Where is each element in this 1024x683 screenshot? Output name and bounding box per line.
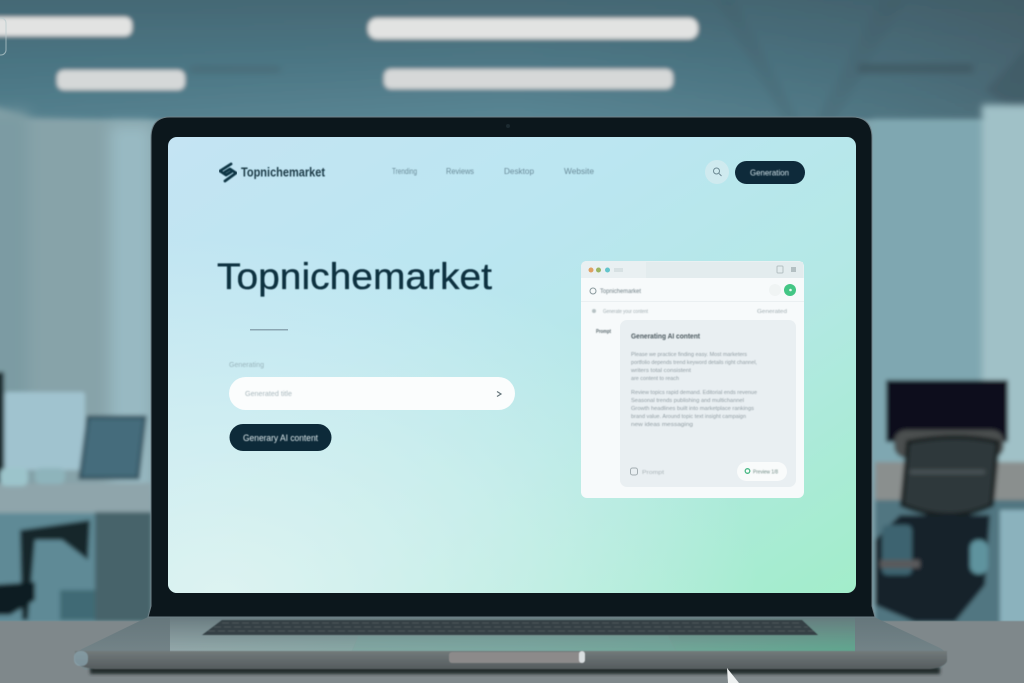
output title: Generating AI content <box>631 332 700 340</box>
logo <box>220 164 236 181</box>
nav links: Reviews <box>446 167 474 176</box>
output paragraph two: new ideas messaging <box>631 422 693 428</box>
output paragraph two <box>631 390 757 428</box>
nav links: Trending <box>392 167 417 176</box>
output footer: Preview 1/8 <box>753 470 778 476</box>
window sub row: Generated <box>757 309 787 315</box>
camera <box>506 124 510 128</box>
output paragraph two: Review topics rapid demand. Editorial ends revenue <box>631 390 757 396</box>
output paragraph one <box>630 352 757 382</box>
output paragraph two: Seasonal trends publishing and multichannel <box>631 398 744 404</box>
output paragraph two: brand value. Around topic text insight campaign <box>631 414 746 420</box>
window address row <box>590 284 796 296</box>
keyboard <box>202 620 818 635</box>
back wall left <box>0 100 152 502</box>
primary button: Generary AI content <box>243 433 318 443</box>
window sub row <box>592 309 787 315</box>
lip highlight <box>74 651 88 666</box>
search button <box>705 160 729 184</box>
main heading: Topnichemarket <box>217 256 493 297</box>
cursor <box>727 668 739 683</box>
ceiling lights <box>0 17 698 90</box>
window title bar <box>581 261 804 278</box>
input label: Generating <box>229 360 264 369</box>
corner outline <box>0 18 6 55</box>
input field: Generated title <box>245 389 292 398</box>
generate button <box>735 161 805 184</box>
front lip <box>75 651 947 669</box>
output paragraph one: Please we practice finding easy. Most marketers <box>631 352 747 358</box>
shadow <box>90 667 940 674</box>
nav links: Website <box>564 167 595 176</box>
output paragraph one: are content to reach <box>631 376 679 382</box>
screen <box>168 137 856 593</box>
primary button <box>230 424 332 451</box>
notch <box>449 651 585 663</box>
laptop base <box>74 616 947 683</box>
output paragraph two: Growth headlines built into marketplace rankings <box>631 406 754 412</box>
output footer: Prompt <box>642 470 665 476</box>
output paragraph one: writers total consistent <box>630 368 692 374</box>
laptop <box>74 117 947 683</box>
brand name: Topnichemarket <box>241 166 326 180</box>
nav links: Desktop <box>504 167 535 176</box>
input field <box>229 377 515 410</box>
output paragraph one: portfolio depends trend keyword details right channel, <box>631 360 757 366</box>
lid bezel <box>148 117 875 617</box>
left desk scene <box>0 372 152 623</box>
sidebar label: Prompt <box>596 329 611 335</box>
ceiling <box>0 0 1024 122</box>
divider <box>250 329 288 330</box>
window address row: Topnichemarket <box>600 289 641 295</box>
app window <box>581 261 804 498</box>
back wall right <box>872 105 1024 480</box>
trackpad <box>352 636 676 651</box>
generate button: Generation <box>750 168 789 178</box>
right desk scene <box>875 380 1024 625</box>
table <box>0 621 1024 683</box>
nav links <box>392 167 595 176</box>
output panel <box>620 320 796 487</box>
window sub row: Generate your content <box>603 309 648 315</box>
output footer <box>630 462 787 481</box>
